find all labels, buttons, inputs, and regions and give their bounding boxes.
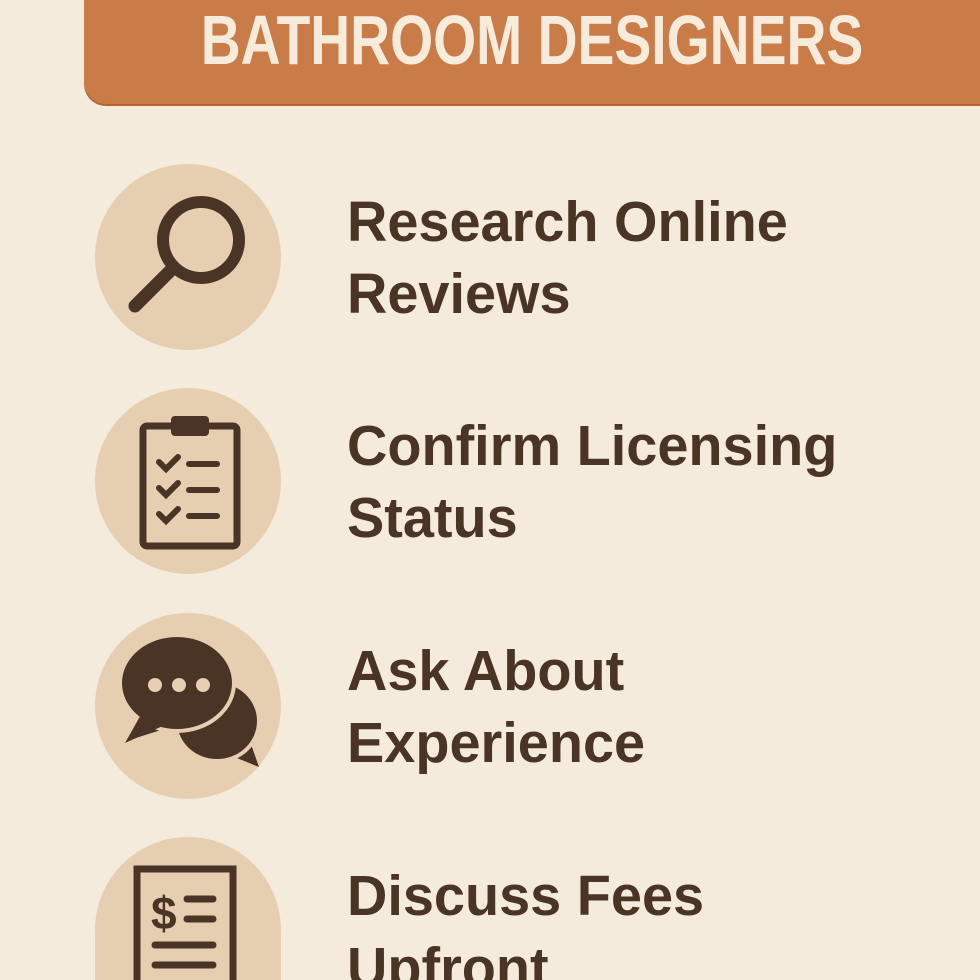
text: experience: Ask About — [347, 639, 624, 703]
text: experience: Experience — [347, 711, 645, 775]
title: BATHROOM DESIGNERS — [201, 1, 863, 79]
text: licensing — [347, 414, 837, 550]
icon: clipboard — [95, 388, 281, 574]
text: experience — [347, 639, 645, 775]
text: research: Reviews — [347, 262, 571, 326]
text: research: Research Online — [347, 190, 788, 254]
text: research — [347, 190, 788, 326]
icon: invoice — [95, 837, 281, 980]
text: fees: Discuss Fees — [347, 864, 704, 928]
icon: chat bubbles — [95, 613, 281, 799]
icon: magnifier — [95, 164, 281, 350]
icon: invoice: $ — [151, 887, 177, 939]
header banner — [84, 0, 980, 104]
text: licensing: Confirm Licensing — [347, 414, 837, 478]
text: licensing: Status — [347, 486, 518, 550]
text: fees — [347, 864, 704, 980]
